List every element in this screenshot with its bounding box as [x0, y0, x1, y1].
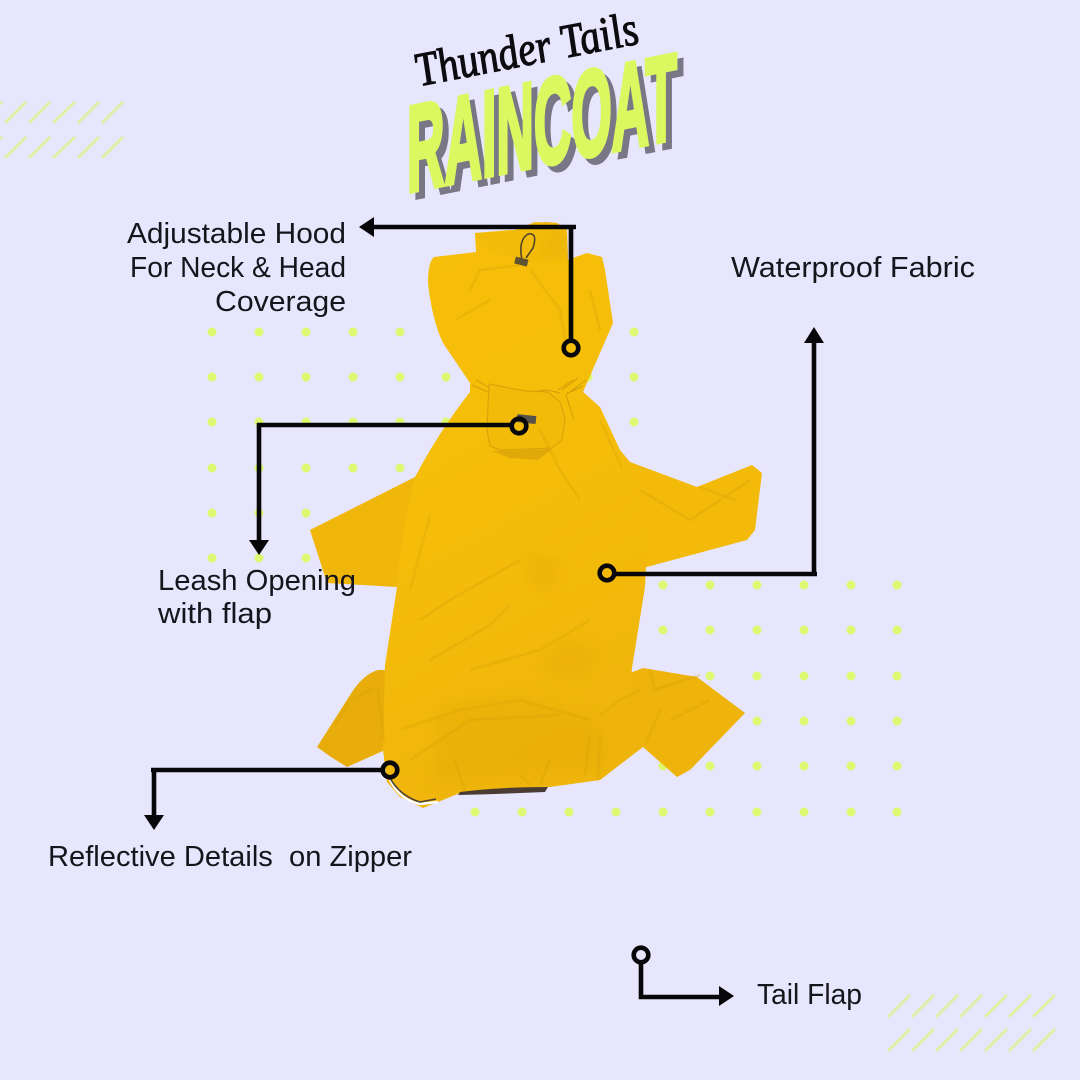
coat: hood toggle cord [514, 234, 535, 267]
text: leash opening: with flap [157, 598, 272, 630]
coat: tail hem [458, 787, 548, 795]
callout: reflective details [48, 763, 412, 873]
text: leash opening: Leash Opening [158, 565, 356, 597]
raincoat illustration [310, 222, 762, 808]
coat: inner hood [476, 222, 568, 270]
text: adjustable hood [127, 218, 346, 318]
coat: right sleeve [620, 450, 762, 568]
coat: soft shading [430, 232, 610, 785]
coat: reflective zipper [390, 780, 438, 804]
decorative stripes: top left [0, 102, 123, 158]
callout: leash opening [157, 419, 526, 630]
text: adjustable hood: For Neck & Head [130, 252, 346, 284]
coat: left sleeve [310, 477, 415, 587]
callout: adjustable hood [127, 217, 578, 355]
text: reflective details: Reflective Details on Zipper [48, 841, 412, 873]
arrow: tail flap [634, 948, 734, 1006]
coat: leash flap [487, 384, 565, 450]
coat: rear left leg [317, 670, 388, 767]
callout: tail flap [634, 948, 862, 1011]
arrow: hood [359, 217, 578, 355]
dot grid: lower right [470, 580, 902, 816]
coat: flap shadow [492, 449, 552, 460]
arrow: leash [249, 419, 526, 555]
coat: label tag [517, 414, 536, 424]
coat: hood fold [476, 222, 567, 262]
arrow: waterproof [600, 327, 824, 580]
text: leash opening [157, 565, 356, 630]
coat: main body [383, 230, 646, 808]
text: waterproof fabric: Waterproof Fabric [731, 252, 975, 284]
coat: wrinkles [335, 265, 750, 790]
coat: rear right leg [600, 668, 745, 780]
title: RAINCOAT [407, 28, 683, 225]
callout: waterproof fabric [600, 252, 975, 580]
arrow: reflective [144, 763, 397, 830]
text: tail flap: Tail Flap [757, 979, 862, 1011]
coat: waist gathers [472, 378, 586, 420]
decorative stripes: bottom right [888, 995, 1055, 1051]
text: adjustable hood: Adjustable Hood [127, 218, 346, 250]
dot grid: upper left [208, 328, 638, 562]
text: adjustable hood: Coverage [215, 286, 346, 318]
